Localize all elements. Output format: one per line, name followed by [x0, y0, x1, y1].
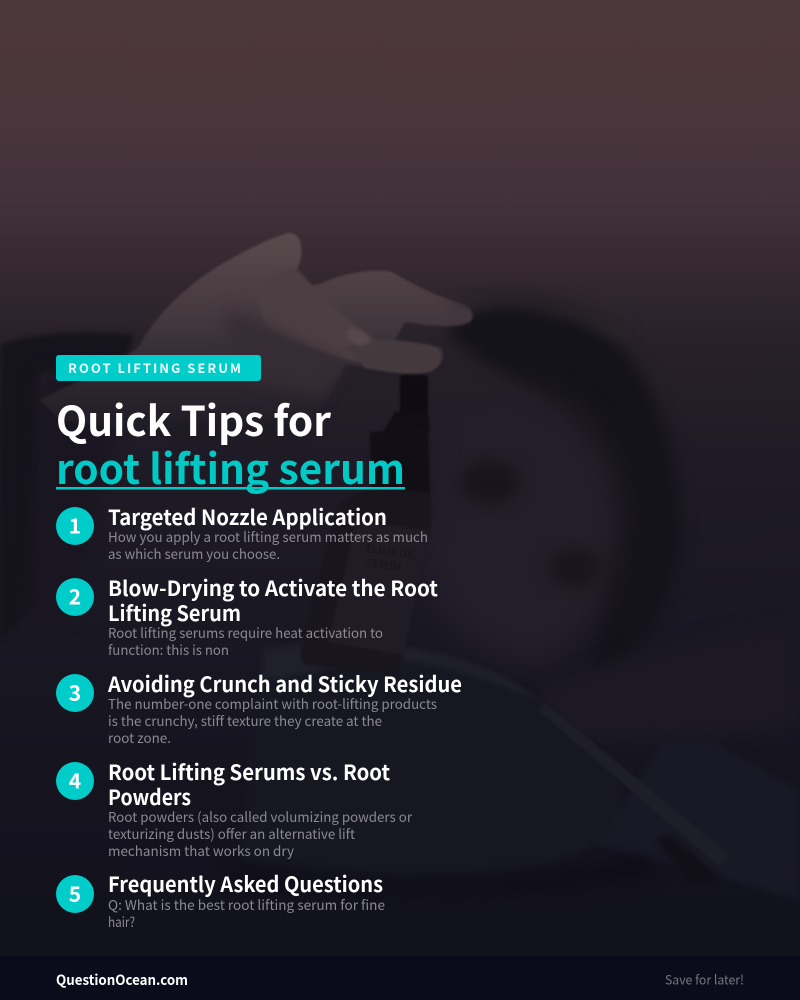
tip 4: mechanism that works on dry [108, 840, 294, 860]
footer bar: QuestionOcean.com [56, 970, 188, 990]
tip 2: Blow-Drying to Activate the Root [108, 573, 438, 603]
tip 1: How you apply a root lifting serum matters as much [108, 526, 428, 546]
badge: ROOT LIFTING SERUM [68, 358, 241, 377]
tip 5: Q: What is the best root lifting serum for fine [108, 894, 385, 914]
tip 4 [56, 757, 413, 860]
tip 1: 1 [69, 510, 81, 540]
tip 1: Targeted Nozzle Application [108, 502, 387, 532]
palm and back [40, 233, 473, 460]
hand [40, 233, 473, 460]
tip 3: root zone. [108, 727, 171, 747]
tip 3 [56, 669, 462, 747]
badge [56, 355, 261, 381]
tip 3: 3 [69, 678, 81, 708]
pillow edge [262, 643, 540, 702]
footer bar: Save for later! [665, 970, 744, 988]
tip 3: The number-one complaint with root-lifting products [108, 693, 437, 713]
tip 4: Powders [108, 782, 191, 812]
tip 1 [56, 502, 428, 563]
left dark headboard [0, 332, 135, 640]
tip 4: 4 [69, 766, 81, 796]
tip 2: Lifting Serum [108, 598, 241, 628]
bottle [300, 375, 431, 673]
background photo: woman with serum bottle: SERUM [365, 555, 402, 575]
face [420, 384, 621, 665]
tweezers [538, 703, 730, 866]
tip 4: Root Lifting Serums vs. Root [108, 757, 390, 787]
tip 5: 5 [69, 878, 81, 908]
background photo: woman with serum bottle: ELIXIR OIL [365, 541, 417, 563]
dark shadow under pillow [230, 855, 660, 895]
tip 4: Root powders (also called volumizing powders or [108, 806, 413, 826]
tip 5: hair? [108, 911, 135, 931]
title: Quick Tips for [56, 388, 331, 448]
tip 5: Frequently Asked Questions [108, 869, 383, 899]
footer bar [0, 956, 800, 1000]
tip 2 [56, 573, 438, 659]
hair wisps [455, 296, 625, 335]
tip 2: function: this is non [108, 639, 229, 659]
book page [596, 736, 800, 900]
pillow [240, 646, 624, 875]
tip 2: 2 [69, 582, 81, 612]
lower finger [255, 269, 380, 362]
tip 3: is the crunchy, stiff texture they create at the [108, 710, 382, 730]
title: root lifting serum [56, 436, 405, 496]
tip 5 [56, 869, 385, 931]
palm shadow [225, 310, 345, 395]
tip 4: texturizing dusts) offer an alternative lift [108, 823, 355, 843]
thumb [345, 340, 441, 374]
title [56, 388, 405, 496]
hair [445, 300, 680, 690]
tip 1: as which serum you choose. [108, 543, 280, 563]
nail [344, 326, 372, 348]
tip 3: Avoiding Crunch and Sticky Residue [107, 669, 462, 699]
arm [540, 615, 800, 745]
tip 2: Root lifting serums require heat activation to [108, 622, 383, 642]
eye [460, 460, 520, 504]
